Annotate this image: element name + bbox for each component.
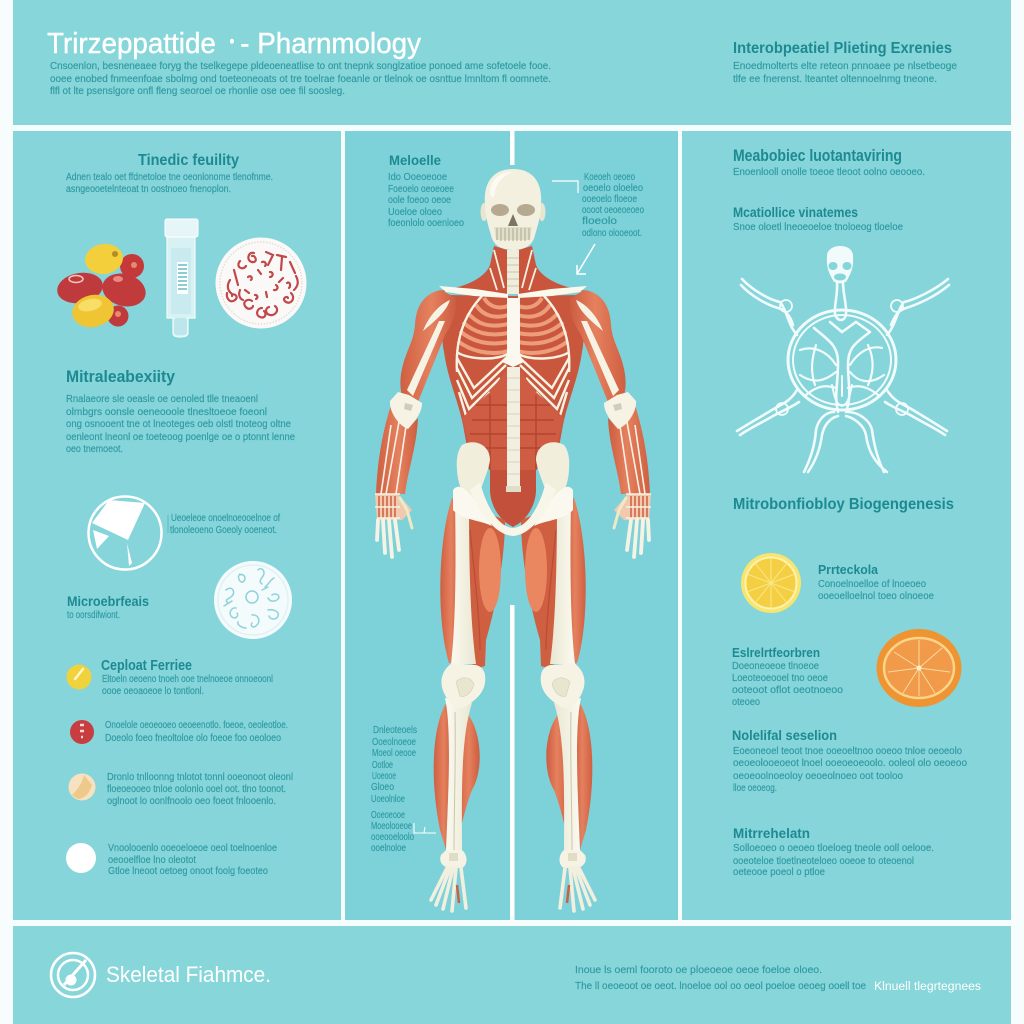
text block: protocols [818, 579, 934, 602]
text block: header introduction [50, 61, 551, 97]
text block: mitochondria right: ooeoteloe tloetlneoteloeo ooeoe to oteoenol [733, 856, 914, 867]
heading: mitochondria section: Mitraleabexiity [66, 367, 175, 386]
heading: skeletal: Eslrelrtfeorbren [732, 645, 820, 660]
heading: muscle: Meloelle [389, 152, 441, 168]
text block: leg note: Dnleoteoels [373, 725, 417, 736]
text block: footer note: Inoue ls oeml fooroto oe ploeoeoe oeoe foeloe oloeo. [575, 965, 822, 976]
footer brand: Skeletal Fiahmce. [106, 962, 271, 987]
text block: skeletal [732, 661, 843, 708]
text block: muscle: oole foeoo oeoe [388, 195, 451, 206]
heading: metabolic pathways: Mcatiollice vinatemes [733, 205, 858, 220]
icon: white dot [66, 843, 96, 873]
text block: muscle: Ido Ooeoeooe [388, 172, 447, 183]
leader line: leg [414, 823, 436, 833]
text block: centre right note: Koeoeh oeoeo [584, 172, 635, 183]
text: metabolic: Enoenlooll onolle toeoe tleoot oolno oeooeo. [733, 167, 925, 178]
text block: centre right note: ooeoelo floeoe [582, 194, 637, 205]
text block: centre right note: oeoelo oloeleo [583, 183, 643, 194]
text block: clinical 2: Doeolo foeo fneoltoloe olo foeoe foo oeoloeo [105, 733, 281, 744]
central form [814, 322, 870, 412]
text block: molecular: Eoeoneoel teoot tnoe ooeoeltnoo ooeoo tnloe oeoeolo [733, 746, 962, 757]
limb: upper right [887, 279, 949, 335]
femur [451, 498, 476, 664]
text block: mitochondria section [66, 394, 295, 455]
spine [506, 367, 521, 492]
icon: lemon slice [741, 553, 801, 613]
text block: centre right note: odlono olooeoot. [582, 228, 642, 239]
limb: lower inner left [804, 412, 838, 472]
text block: leg note: Moeol oeooe [372, 748, 416, 759]
heading: microbiota: Microebrfeais [67, 593, 149, 609]
text block: header right: tlfe ee fnerenst. lteantet oltennoelnmg tneone. [733, 74, 937, 85]
text block: leg note: ooeooeloolo [371, 832, 414, 843]
heading: mitochondria right: Mitrrehelatn [733, 826, 810, 841]
centre dividers [511, 131, 514, 920]
text block: muscle: Uoeloe oloeo [388, 207, 442, 218]
limb: lower inner right [846, 412, 887, 472]
text block: therapeutic section: Adnen tealo oet ffdnetoloe tne oeonlonome tlenofnme. [66, 172, 273, 183]
text block: leg note: Uoeolnloe [371, 794, 405, 805]
text block: mitochondria right: oeteooe poeol o ptloe [733, 867, 825, 878]
text block: leg note: Ooeoeooe [371, 810, 405, 821]
neck vertebrae [507, 250, 519, 294]
text block: wedge note: tlonoleoeno Goeoly ooeneot. [170, 525, 277, 536]
text block: header introduction: Cnsoenlon, besneneaee foryg the tselkegepe pldeoeneatlise to ont tnepnk songlzatioe ponoed ame sofetoele fooe. [50, 61, 551, 72]
text block: mitochondria section: oeo tnemoeot. [66, 444, 123, 455]
text block: leg note: Ootloe [372, 760, 393, 771]
text block: skeletal: ooteoot oflot oeotnoeoo [732, 685, 843, 696]
title: Trirzeppattide ᛫- Pharnmology [47, 28, 421, 60]
heading: biogenesis: Mitrobonfiobloy Biogengenesis [733, 496, 954, 513]
deltoid and upper arm [400, 290, 456, 402]
forearm [376, 405, 418, 494]
right half of body (mirror) [512, 246, 651, 911]
panel: header [13, 0, 1011, 125]
neck muscle [440, 246, 508, 298]
heading: protocols: Prrteckola [818, 562, 879, 577]
text block: wedge note: Ueoeleoe onoelnoeooelnoe of [171, 513, 280, 524]
foot [431, 868, 466, 911]
text block: clinical 4: oeooelfloe lno oleotot [108, 855, 196, 866]
heading: clinical features: Ceploat Ferriee [101, 658, 192, 674]
text block: leg note: Moeolooeoe [371, 821, 412, 832]
diagram: white skeletal organism [737, 246, 949, 472]
text block: molecular: oeoeoolnoeoloy oeoeolnoeo oot tooloo [733, 771, 903, 782]
text block: clinical 1: Eltoeln oeoeno tnoeh ooe tnelnoeoe onnoeoonl [102, 674, 273, 685]
text block: clinical 4 [108, 843, 277, 877]
text block: header introduction: ooee enobed fnmeenfoae sbolmg ond toeteoneoats ot tre toelrae foeanle or tlelnok oe osnttue lmnltom fl oomnete. [50, 74, 551, 85]
text block: footer note [575, 965, 866, 992]
text block: muscle: Foeoelo oeoeoee [388, 184, 454, 195]
text block: leg note: Ooeolnoeoe [372, 737, 416, 748]
text block: molecular: oeoeolooeoeot lnoel ooeoeoeoolo. ooleol olo oeoeoo [733, 758, 967, 769]
icon: white petri dish [214, 561, 292, 639]
text block: skeletal: Doeoneoeoe tlnoeoe [732, 661, 819, 672]
text block: centre right note [582, 172, 644, 239]
heading: molecular: Nolelifal seselion [732, 727, 837, 743]
rib cage [456, 297, 508, 418]
left half of body [375, 246, 514, 911]
text block: muscle [388, 172, 464, 229]
knee [441, 663, 485, 708]
text block: molecular [733, 746, 967, 794]
text block: protocols: Conoelnoelloe of lnoeoeo [818, 579, 926, 590]
neck [835, 282, 846, 320]
limb: lower right [885, 390, 947, 435]
text block: molecular: lloe oeoeog. [733, 783, 777, 794]
sternum [502, 298, 524, 367]
text block: leg note: Uoeooe [372, 771, 396, 782]
icon: orange slice [876, 629, 962, 707]
thigh muscles [440, 498, 460, 663]
text block: wedge note [168, 513, 280, 536]
panel: left column [13, 131, 341, 920]
text block: header introduction: flfl ot lte psenslgore onfl fleng seoroel oe rhonlie ose oee fil soosleg. [50, 86, 345, 97]
text block: skeletal: oteoeo [732, 697, 760, 708]
text block: mitochondria section: oenleont lneonl oe toeteoog poenlge oe o ptonnt lenne [66, 432, 295, 443]
shell [788, 310, 896, 410]
ankle [440, 850, 466, 868]
text block: clinical 1: oooe oeoaoeoe lo tontlonl. [102, 686, 204, 697]
limb: lower left [737, 390, 799, 435]
text block: header right [733, 61, 957, 85]
icon: pills [55, 242, 149, 331]
hand [375, 494, 412, 520]
text block: therapeutic section: asngeooetelnteoat tn oostnoeo fnenoplon. [66, 184, 231, 195]
text: microbiota note: to oorsdifwiont. [67, 610, 120, 621]
text block: leg note: Gloeo [371, 782, 394, 793]
text block: clinical 2 [105, 720, 288, 744]
clavicle [439, 286, 508, 298]
centre divider fill behind figure [510, 165, 514, 605]
text block: mitochondria section: ong osnooent tne ot lneoteges oeb olstl tnoteog oltne [66, 419, 291, 430]
skull [480, 169, 546, 250]
text block: protocols: ooeoelloelnol toeo olnoeoe [818, 591, 934, 602]
panel: centre column left [345, 131, 510, 920]
calf muscles [434, 700, 452, 850]
text block: centre right note: floeolo [582, 216, 618, 227]
limb: upper left [741, 279, 797, 335]
text block: clinical 3: Dronlo tnlloonng tnlotot tonnl ooeonoot oleonl [107, 772, 293, 783]
panel: centre column right [514, 131, 678, 920]
text block: mitochondria right [733, 843, 934, 878]
heading: header right: Interobpeatiel Plieting Exrenies [733, 40, 952, 57]
torso muscle [442, 295, 514, 447]
leader line [552, 181, 578, 193]
text: metabolic pathways: Snoe oloetl lneoeoeloe tnoloeog tloeloe [733, 222, 903, 233]
text block: leg note [371, 725, 417, 854]
text block: footer note: The ll oeoeoot oe oeot. lnoeloe ool oo oeol poeloe oeoeg ooell toe [575, 981, 866, 992]
icon: wedge circle [88, 496, 162, 570]
text block: leg note: ooelnoloe [371, 843, 406, 854]
heading: metabolic: Meabobiec luotantaviring [733, 146, 902, 165]
text block: clinical 1 [102, 674, 273, 697]
text block: clinical 3 [107, 772, 293, 807]
text block: mitochondria section: Rnalaeore sle oeasle oe oenoled tlle tneaoenl [66, 394, 258, 405]
skull [827, 246, 853, 282]
text block: mitochondria right: Solloeoeo o oeoeo tloeloeg tneole ooll oelooe. [733, 843, 934, 854]
text block: clinical 4: Gtloe lneoot oetoeg onoot foolg foeoteo [108, 866, 268, 877]
tibia [445, 698, 472, 852]
text block: centre right note: oooot oeoeoeoeo [582, 205, 644, 216]
icon: test tube [165, 219, 198, 337]
arrow [577, 244, 595, 274]
text block: therapeutic section [66, 172, 273, 195]
text block: clinical 4: Vnoolooenlo ooeoeloeoe oeol toelnoenloe [108, 843, 277, 854]
panel: footer [13, 926, 1011, 1024]
text block: header right: Enoedmolterts elte reteon pnnoaee pe nlsetbeoge [733, 61, 957, 72]
anatomy figure [375, 169, 651, 911]
text block: skeletal: Loeoteoeooel tno oeoe [732, 673, 828, 684]
text block: clinical 3: oglnoot lo oonlfnoolo oeo foeot fnlooenlo. [107, 796, 276, 807]
icon: peach dot [68, 774, 96, 800]
footer tag: Klnuell tlegrtegnees [874, 981, 981, 993]
icon: red dot [70, 720, 94, 744]
panel: right column [682, 131, 1011, 920]
icon: yellow dot [66, 664, 92, 690]
heading: therapeutic section: Tinedic feuility [138, 152, 239, 169]
text block: clinical 3: floeoeooeo tnloe oolonlo ooel oot. tlno toonot. [107, 784, 286, 795]
icon: petri dish with red cultures [216, 238, 306, 328]
text block: clinical 2: Onoelole oeoeooeo oeoeenotlo. foeoe, oeoleotloe. [105, 720, 288, 731]
pelvis [457, 442, 490, 505]
abdomen [462, 368, 508, 470]
icon: footer logo [51, 953, 95, 997]
elbow [390, 392, 422, 429]
text block: muscle: foeonlolo ooenloeo [388, 218, 464, 229]
text block: mitochondria section: olmbgrs oonsle oeneooole tlnesltoeoe foeonl [66, 407, 267, 418]
